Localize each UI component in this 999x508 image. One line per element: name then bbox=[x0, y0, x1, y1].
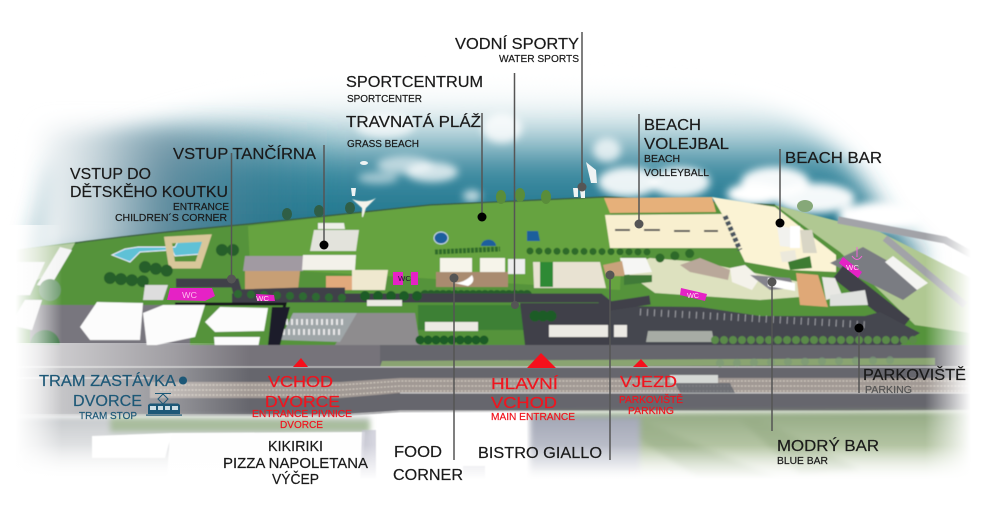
label: hlavní vchod: MAIN ENTRANCE bbox=[491, 412, 575, 423]
bistro giallo building bbox=[603, 258, 652, 285]
white long buildings bbox=[367, 300, 627, 337]
label: food corner: CORNER bbox=[393, 467, 463, 484]
label: kikiriki: KIKIRIKI bbox=[268, 439, 323, 455]
label: vstup tančírna: VSTUP TANČÍRNA bbox=[173, 144, 316, 163]
green beds bbox=[540, 262, 553, 287]
WC 4: WC bbox=[687, 293, 699, 300]
tree row bbox=[238, 294, 345, 298]
WC 4 bbox=[680, 288, 707, 301]
WC 5 bbox=[839, 247, 862, 278]
sun beds bbox=[725, 216, 740, 250]
label: vchod dvorce: VCHOD bbox=[268, 374, 333, 391]
label: vstup do dětského koutku bbox=[70, 166, 229, 224]
label: travnatá pláž: GRASS BEACH bbox=[347, 139, 419, 150]
lower lot bbox=[30, 305, 190, 355]
car shelters bbox=[646, 331, 714, 342]
WC 5: WC bbox=[846, 265, 859, 272]
WC 3 bbox=[393, 272, 418, 285]
label: tram stop: DVORCE bbox=[73, 393, 142, 410]
right white shed bbox=[885, 256, 928, 290]
WC 2 bbox=[256, 294, 275, 303]
label: vjezd: PARKING bbox=[628, 406, 674, 417]
label: beach bar: BEACH BAR bbox=[785, 150, 882, 167]
label: beach volejbal: BEACH bbox=[644, 117, 701, 134]
label: travnatá pláž bbox=[346, 112, 481, 150]
tram stop dot bbox=[179, 376, 187, 384]
upper right car park bbox=[830, 247, 927, 300]
label: food corner bbox=[393, 444, 463, 484]
parking tree row bbox=[715, 336, 920, 344]
label: modrý bar: BLUE BAR bbox=[777, 456, 828, 467]
leader lines bbox=[232, 32, 859, 460]
right access road bbox=[838, 220, 985, 305]
main white buildings bbox=[80, 285, 268, 348]
lower field bbox=[0, 411, 985, 488]
hedge bbox=[425, 290, 532, 300]
food corner tents bbox=[436, 258, 525, 287]
boats bbox=[351, 161, 597, 198]
label: tram stop bbox=[39, 371, 176, 422]
bottom left tree bbox=[30, 330, 60, 360]
sportcentrum terrace bbox=[533, 262, 606, 288]
label: vstup do dětského koutku: VSTUP DO bbox=[70, 166, 151, 183]
label: vstup do dětského koutku: CHILDREN´S CORNER bbox=[115, 212, 227, 224]
tram track bbox=[150, 378, 999, 398]
beach volleyball sand bbox=[604, 197, 836, 272]
label: kikiriki: PIZZA NAPOLETANA bbox=[223, 456, 368, 472]
label: tram stop: TRAM ZASTÁVKA bbox=[39, 371, 176, 390]
tram on track bbox=[670, 375, 718, 383]
WC 1: WC bbox=[182, 291, 197, 300]
aerial site plan bbox=[0, 197, 999, 416]
label: vstup do dětského koutku: ENTRANCE bbox=[173, 202, 229, 213]
label: parkoviště: PARKOVIŠTĚ bbox=[863, 365, 966, 384]
pier bbox=[352, 198, 376, 217]
modrý bar buildings bbox=[606, 258, 868, 307]
label: beach volejbal: VOLEJBAL bbox=[644, 136, 729, 153]
label: vchod dvorce: DVORCE bbox=[280, 420, 323, 431]
label: modrý bar: MODRÝ BAR bbox=[777, 436, 879, 455]
label: vchod dvorce: ENTRANCE PIVNICE bbox=[252, 409, 352, 420]
shoreline bbox=[75, 197, 775, 243]
label: vodní sporty bbox=[455, 34, 579, 65]
label: beach volejbal bbox=[644, 117, 729, 179]
tančírna building bbox=[243, 255, 388, 290]
hedge row beach bbox=[530, 251, 655, 252]
WC 1 bbox=[167, 288, 215, 301]
label: sportcentrum: SPORTCENTRUM bbox=[346, 74, 483, 91]
label: modrý bar bbox=[777, 436, 879, 467]
edge fades bbox=[0, 200, 999, 508]
main parking lot bbox=[600, 306, 920, 345]
white buildings below road bbox=[92, 420, 527, 508]
pool bbox=[112, 238, 207, 265]
label: beach volejbal: VOLLEYBALL bbox=[644, 168, 709, 179]
sports pitch bbox=[310, 230, 359, 251]
grass beach bbox=[248, 197, 622, 290]
beach bar pavilion bbox=[777, 225, 817, 270]
lot access road bbox=[838, 272, 905, 325]
label: kikiriki bbox=[223, 439, 368, 488]
label: vchod dvorce bbox=[252, 374, 352, 431]
label: travnatá pláž: TRAVNATÁ PLÁŽ bbox=[346, 112, 481, 131]
label: food corner: FOOD bbox=[394, 444, 442, 461]
label: vchod dvorce: DVORCE bbox=[265, 394, 340, 411]
label: vodní sporty: WATER SPORTS bbox=[499, 54, 579, 65]
pale grass left bbox=[14, 243, 75, 290]
hedges lower bbox=[420, 336, 485, 344]
entrance triangles bbox=[293, 353, 648, 368]
WC 2: WC bbox=[256, 294, 270, 303]
sport courts bbox=[434, 231, 540, 246]
children's corner trees bbox=[110, 250, 240, 282]
label: vodní sporty: VODNÍ SPORTY bbox=[455, 34, 579, 53]
label: parkoviště: PARKING bbox=[865, 385, 912, 396]
left pale trees bbox=[39, 279, 61, 301]
parking stripes bbox=[640, 312, 870, 325]
road markings bbox=[0, 367, 999, 415]
label: vstup do dětského koutku: DĚTSKĚHO KOUTKU bbox=[70, 182, 228, 201]
median strip bbox=[380, 358, 935, 367]
label: beach volejbal: BEACH bbox=[644, 154, 680, 165]
label: kikiriki: VÝČEP bbox=[272, 471, 319, 488]
label: vjezd: VJEZD bbox=[620, 374, 677, 391]
label: hlavní vchod: VCHOD bbox=[491, 395, 557, 412]
river with sky reflection bbox=[30, 85, 930, 262]
road bbox=[0, 345, 999, 416]
lawn base bbox=[14, 197, 985, 350]
label: parkoviště bbox=[863, 365, 966, 396]
reflected clouds bbox=[355, 112, 922, 230]
WC 3: WC bbox=[398, 274, 412, 283]
verge trees bbox=[720, 360, 900, 363]
shore trees bbox=[282, 188, 813, 220]
label: sportcentrum: SPORTCENTER bbox=[347, 94, 422, 105]
dark surrounding of canopy bbox=[268, 307, 290, 345]
label: bistro giallo: BISTRO GIALLO bbox=[478, 445, 602, 462]
leader dots bbox=[227, 182, 864, 332]
label: tram stop: TRAM STOP bbox=[79, 411, 137, 422]
left edge buildings bbox=[0, 247, 72, 330]
WC pavilions bbox=[167, 247, 862, 303]
label: sportcentrum bbox=[346, 74, 483, 105]
pale grass right bbox=[775, 205, 985, 335]
dark internal road bbox=[176, 283, 650, 306]
pivnice canopy bbox=[280, 313, 357, 342]
buildings row bbox=[318, 223, 345, 229]
label: hlavní vchod bbox=[491, 374, 575, 423]
label: vjezd bbox=[619, 374, 683, 417]
label: vjezd: PARKOVIŠTĚ bbox=[619, 393, 683, 406]
icon: tram bbox=[146, 394, 182, 416]
road whitening on the left bbox=[0, 343, 250, 419]
label: hlavní vchod: HLAVNÍ bbox=[491, 374, 559, 393]
